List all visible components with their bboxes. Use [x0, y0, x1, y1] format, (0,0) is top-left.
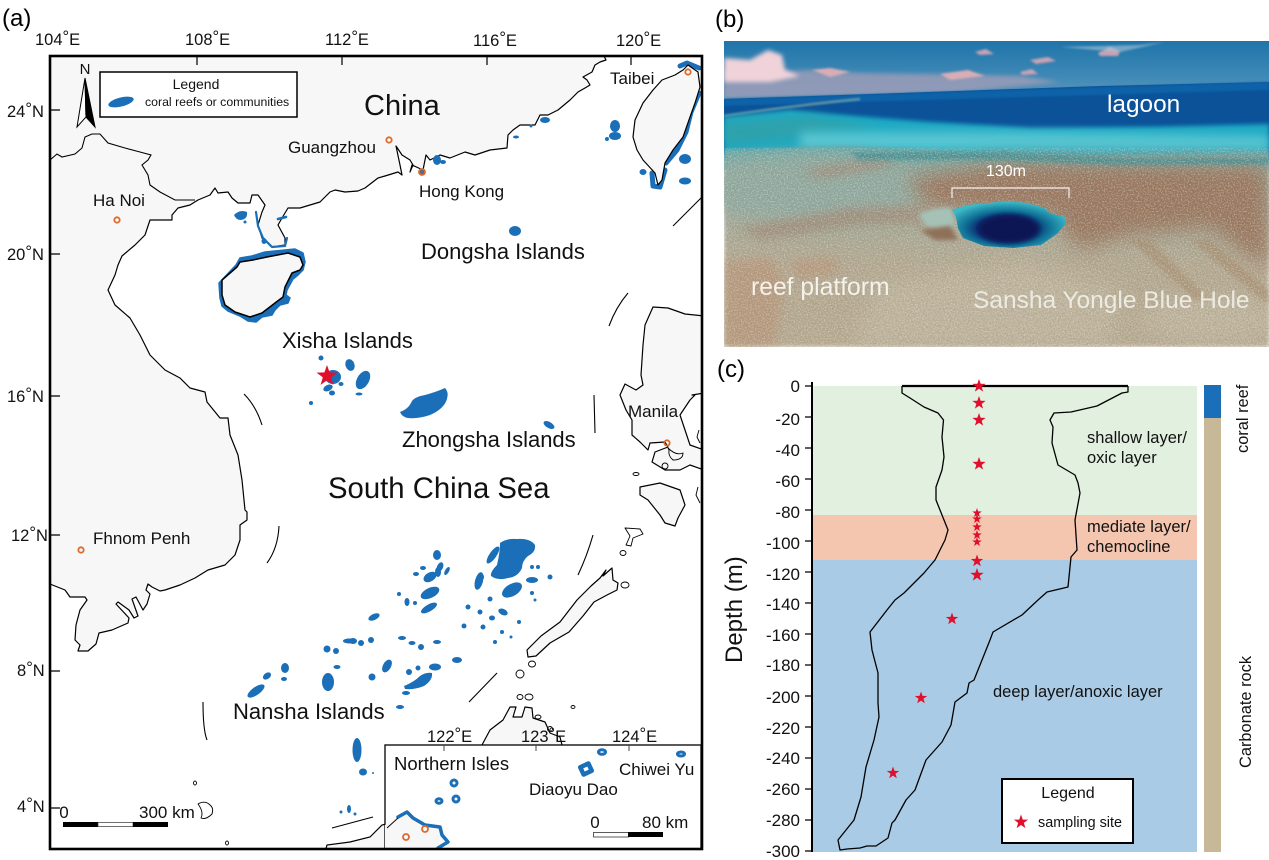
latitude labels: 12	[11, 527, 29, 545]
scale bar: 0	[59, 803, 69, 822]
reef: Zhongsha	[400, 388, 556, 431]
city labels: Ha Noi	[93, 191, 145, 210]
latitude labels: 4	[17, 798, 26, 816]
Leizhou and coastal reefs	[256, 212, 287, 247]
y axis tick labels: -120	[766, 565, 800, 584]
latitude labels: °	[25, 100, 32, 118]
lagoon sea	[724, 82, 1269, 160]
inset labels: Diaoyu Dao	[529, 780, 618, 799]
layer labels: chemocline	[1087, 538, 1170, 556]
y axis tick labels: -180	[766, 656, 800, 675]
inset longitude labels: E	[646, 728, 657, 746]
label: China: China	[364, 90, 441, 122]
Borneo	[482, 706, 562, 744]
longitude labels: °	[351, 28, 358, 46]
inset scale bar: 80 km	[642, 813, 688, 832]
layer labels: oxic layer	[1087, 449, 1157, 467]
reef: Xisha	[309, 356, 373, 405]
y axis tick labels: -40	[775, 441, 800, 460]
sky	[724, 41, 1269, 99]
panel: (c) depth profile	[717, 356, 1255, 860]
longitude labels: °	[644, 29, 650, 47]
inset labels: Chiwei Yu	[619, 760, 694, 779]
hole pale fringe	[918, 208, 955, 230]
city labels: Hong Kong	[419, 182, 504, 201]
inset scale bar	[590, 813, 688, 837]
inset longitude labels: 124	[612, 728, 640, 746]
dashed maritime boundary lines	[203, 197, 702, 828]
sea and island labels: Zhongsha Islands	[402, 427, 576, 452]
longitude labels: °	[63, 28, 69, 46]
longitude labels: °	[499, 29, 506, 47]
reef rim	[724, 99, 860, 116]
mainland land mass	[50, 56, 606, 651]
lithology bar	[1204, 385, 1221, 852]
lithology labels: Carbonate rock	[1237, 655, 1255, 768]
brown rim west of hole	[920, 226, 958, 240]
city labels	[93, 69, 679, 548]
y axis tick labels: -60	[775, 472, 800, 491]
city labels: Fhnom Penh	[93, 529, 190, 548]
Hainan island with reef	[219, 249, 305, 322]
y axis tick labels: -20	[775, 410, 800, 429]
y axis tick labels: -140	[766, 595, 800, 614]
Mindoro	[640, 483, 685, 526]
shallow turquoise	[724, 110, 1269, 170]
left grey-green reef	[700, 158, 920, 222]
latitude labels: N	[32, 246, 44, 264]
longitude labels: 120	[616, 32, 644, 50]
map body	[50, 56, 704, 852]
icon: north arrow	[77, 61, 95, 127]
inset longitude labels: °	[455, 725, 461, 743]
surface texture	[724, 148, 1269, 347]
inset ticks	[444, 745, 629, 751]
inset scale bar: 0	[590, 813, 600, 832]
sea and island labels: Xisha Islands	[282, 328, 413, 353]
y axis tick labels: -160	[766, 626, 800, 645]
orange reef patches lower left	[724, 258, 840, 347]
longitude labels: E	[506, 32, 517, 50]
longitude labels: 116	[473, 32, 499, 50]
aerial photo	[700, 41, 1269, 347]
inset longitude labels: 122	[427, 728, 455, 746]
map legend	[100, 72, 297, 117]
latitude labels: N	[32, 388, 44, 406]
latitude labels: N	[33, 662, 45, 680]
pale lagoon shoal	[800, 132, 1269, 150]
latitude labels: 24	[7, 103, 25, 121]
blue hole outline	[838, 386, 1128, 850]
water layer bands	[812, 386, 1197, 852]
lithology labels: coral reef	[1234, 384, 1252, 453]
y axis tick labels: -220	[766, 719, 800, 738]
sea and island labels: Nansha Islands	[233, 699, 385, 724]
latitude labels: 16	[7, 388, 25, 406]
latitude labels: °	[25, 243, 32, 261]
depth chart legend: sampling site	[1038, 815, 1122, 831]
y axis tick labels: 0	[791, 377, 800, 396]
y axis tick labels: -240	[766, 749, 800, 768]
longitude labels: E	[69, 31, 80, 49]
coral reefs	[234, 117, 691, 816]
inset longitude labels: °	[640, 725, 646, 743]
y axis tick labels: -280	[766, 811, 800, 830]
reef streaks lower right	[1130, 240, 1269, 305]
sea and island labels	[233, 239, 585, 724]
inset map	[385, 725, 701, 852]
y axis tick labels: -100	[766, 534, 800, 553]
panel: (a) location map	[2, 5, 704, 852]
layer labels: shallow layer/	[1087, 429, 1187, 447]
panel label (b): (b)	[715, 6, 744, 33]
Luzon	[620, 307, 704, 470]
lithology labels	[1234, 384, 1255, 768]
latitude labels: 20	[7, 246, 25, 264]
depth chart legend	[1002, 779, 1133, 843]
pale reef flat	[850, 262, 1269, 347]
scale bracket 130 m	[952, 163, 1069, 198]
y axis tick labels	[766, 377, 800, 860]
blue hole	[952, 201, 1066, 248]
clouds	[724, 42, 1165, 98]
latitude labels: 8	[17, 662, 26, 680]
Taiwan	[633, 63, 700, 187]
dark teal reef edge	[850, 152, 1269, 165]
label: South China Sea: South China Sea	[328, 472, 550, 505]
inset longitude labels	[427, 725, 657, 746]
map legend: Legend	[173, 76, 219, 92]
photo label: Sansha Yongle Blue Hole: Sansha Yongle Blue Hole	[973, 287, 1250, 314]
layer labels: deep layer/anoxic layer	[993, 683, 1163, 701]
longitude labels: E	[650, 32, 661, 50]
inset longitude labels: °	[549, 725, 555, 743]
y axis title: Depth (m)	[721, 556, 748, 663]
left brown streaks	[745, 158, 928, 242]
sampling stars	[887, 379, 986, 778]
city labels: Guangzhou	[288, 138, 376, 157]
y axis tick labels: -200	[766, 688, 800, 707]
sea and island labels: Dongsha Islands	[421, 239, 585, 264]
inset longitude labels: 123	[521, 728, 549, 746]
latitude labels: N	[36, 527, 48, 545]
icon: sampling site star	[317, 365, 337, 385]
latitude labels: N	[32, 103, 44, 121]
Sarawak coast	[326, 824, 384, 848]
map frame	[50, 56, 702, 849]
panel: (b) aerial photo of blue hole	[700, 6, 1269, 347]
longitude labels: 112	[325, 31, 351, 49]
y axis tick labels: -80	[775, 503, 800, 522]
y axis	[805, 382, 812, 852]
Palawan	[527, 568, 618, 657]
inset longitude labels: E	[461, 728, 472, 746]
city labels: Manila	[628, 402, 679, 421]
longitude labels	[35, 28, 661, 50]
panel label (a): (a)	[2, 5, 31, 32]
longitude labels: °	[213, 28, 219, 46]
latitude labels: °	[26, 659, 33, 677]
icon: north arrow: N	[80, 61, 90, 78]
layer labels: mediate layer/	[1087, 518, 1191, 536]
inset labels: Northern Isles	[394, 753, 509, 774]
longitude labels: E	[358, 31, 369, 49]
panel label (c): (c)	[717, 356, 745, 383]
reef flat	[724, 146, 1269, 347]
y axis tick labels: -260	[766, 780, 800, 799]
China-Vietnam border	[50, 134, 195, 200]
scale bracket 130 m: 130m	[986, 163, 1026, 180]
map ticks	[50, 56, 631, 808]
latitude labels: N	[33, 798, 45, 816]
longitude labels: 104	[35, 31, 63, 49]
brown reef band	[905, 162, 1269, 270]
latitude labels: °	[29, 524, 36, 542]
water surface line	[902, 385, 1128, 387]
inset longitude labels: E	[555, 728, 566, 746]
inset labels	[394, 753, 694, 799]
scale bar	[59, 803, 195, 827]
latitude labels	[7, 100, 48, 816]
city labels: Taibei	[610, 69, 654, 88]
latitude labels: °	[25, 385, 32, 403]
city markers	[78, 69, 691, 553]
latitude labels: °	[26, 795, 33, 813]
small island outlines	[194, 430, 700, 845]
reef: Nansha	[246, 539, 553, 816]
depth chart legend: Legend	[1041, 785, 1095, 802]
longitude labels: E	[219, 31, 230, 49]
longitude labels: 108	[185, 31, 213, 49]
photo label: lagoon: lagoon	[1107, 91, 1180, 118]
photo label: reef platform: reef platform	[751, 274, 890, 301]
scale bar: 300 km	[139, 803, 195, 822]
reef: mainland coast	[234, 117, 691, 236]
layer labels	[993, 429, 1191, 701]
map legend: coral reefs or communities	[145, 95, 289, 109]
horizon band	[724, 82, 1269, 106]
